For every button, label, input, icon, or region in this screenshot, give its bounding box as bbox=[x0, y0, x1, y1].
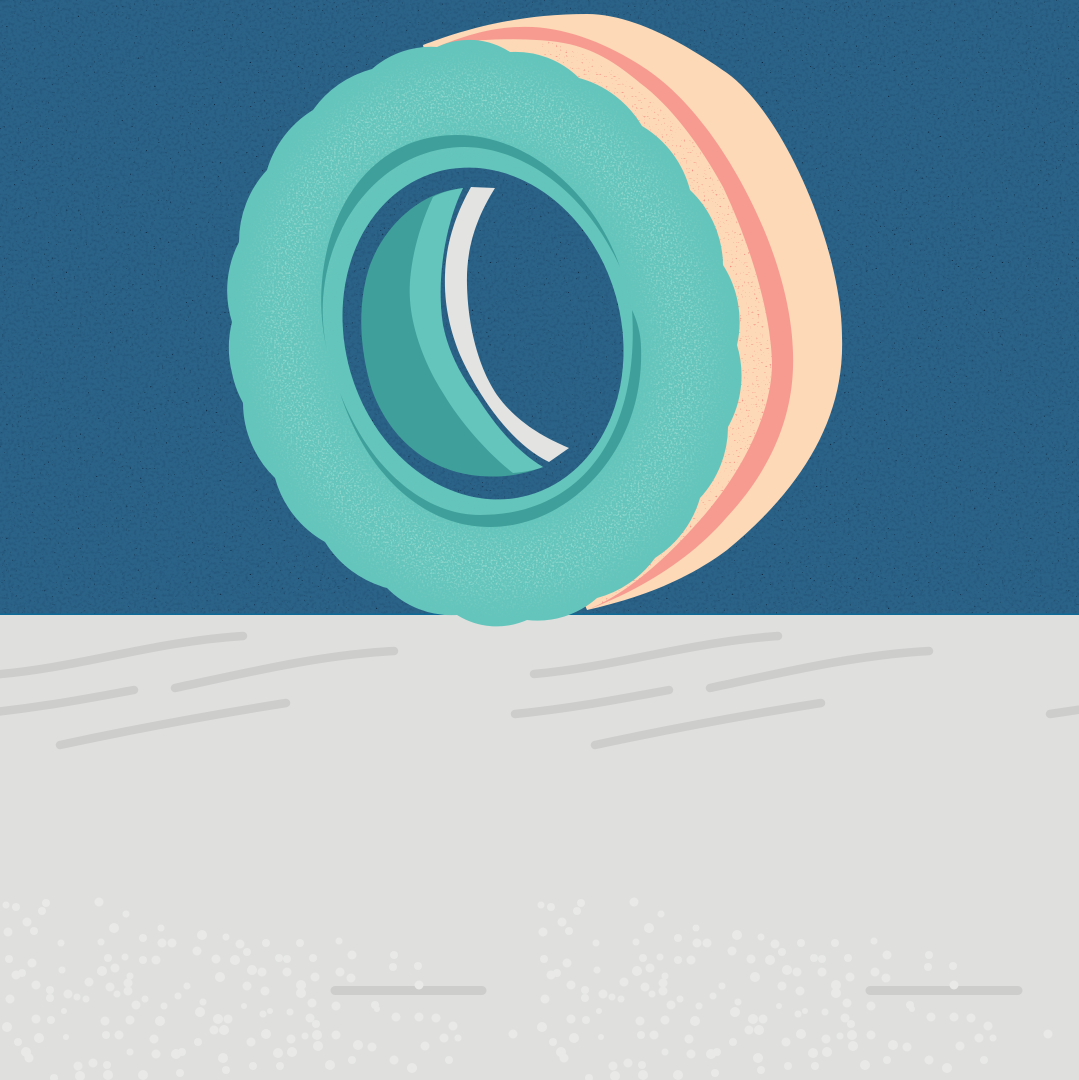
road markings: lower dashes bbox=[335, 986, 1018, 995]
groove: lower dark crescent bbox=[340, 310, 641, 527]
inner wall: dark teal bbox=[361, 188, 543, 477]
tire tread side: peach bbox=[423, 14, 842, 610]
tire outer body with scalloped tread lugs bbox=[227, 40, 742, 626]
tire tread speckles bbox=[542, 42, 772, 607]
tire tread stripe: salmon bbox=[437, 27, 793, 610]
tire hole bbox=[342, 168, 624, 500]
tire surface grain bbox=[244, 58, 725, 610]
road gravel dots bbox=[2, 898, 1052, 1080]
tire: front sidewall bbox=[225, 35, 745, 630]
background: dark blue sky bbox=[0, 0, 1079, 615]
inner wall: light teal band bbox=[410, 188, 543, 473]
inner rim: white crescent bbox=[445, 187, 569, 462]
ground: pale grey road bbox=[0, 615, 1079, 1080]
road markings: upper streaks bbox=[0, 636, 1079, 745]
groove: upper dark crescent bbox=[321, 135, 620, 350]
